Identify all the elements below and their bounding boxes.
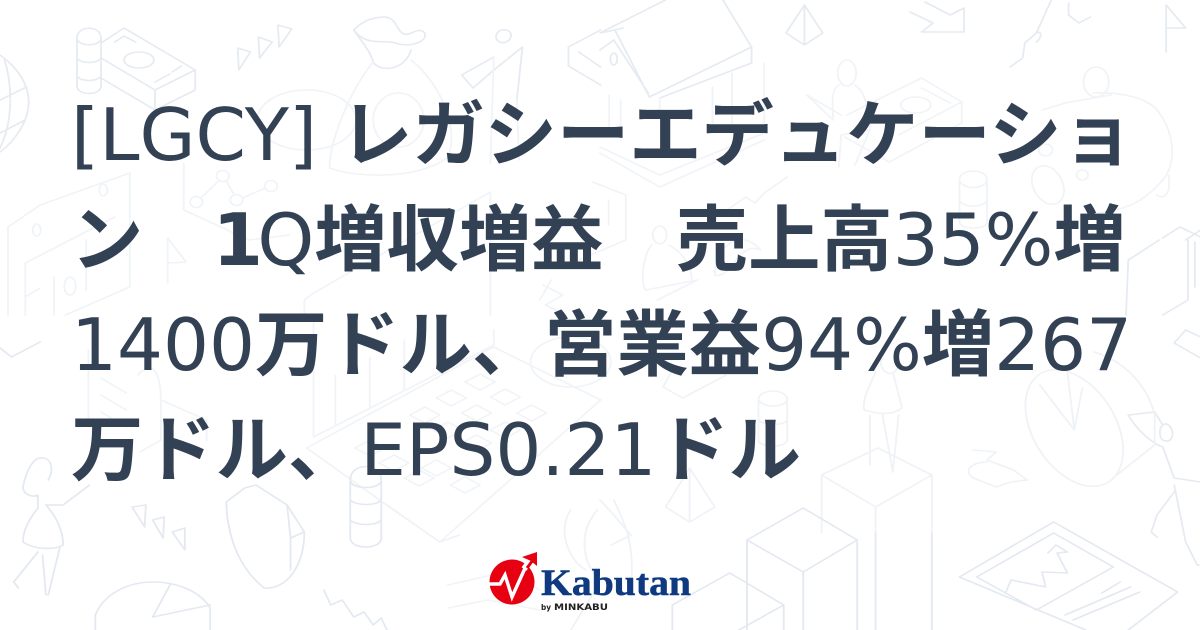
tagline	[541, 603, 608, 613]
title: 万ドル、EPS0.21ドル	[71, 391, 801, 496]
icon: red circle with chart arrow	[489, 552, 537, 604]
tagline: MINKABU	[554, 603, 608, 613]
title: ン 1Q増収増益 売上高35%増	[71, 181, 1126, 286]
wordmark: Kabutan	[541, 563, 691, 604]
title: [LGCY] レガシーエデュケーショ	[71, 76, 1134, 181]
title: 1400万ドル、営業益94%増267	[71, 286, 1132, 391]
tagline: by	[541, 603, 552, 612]
